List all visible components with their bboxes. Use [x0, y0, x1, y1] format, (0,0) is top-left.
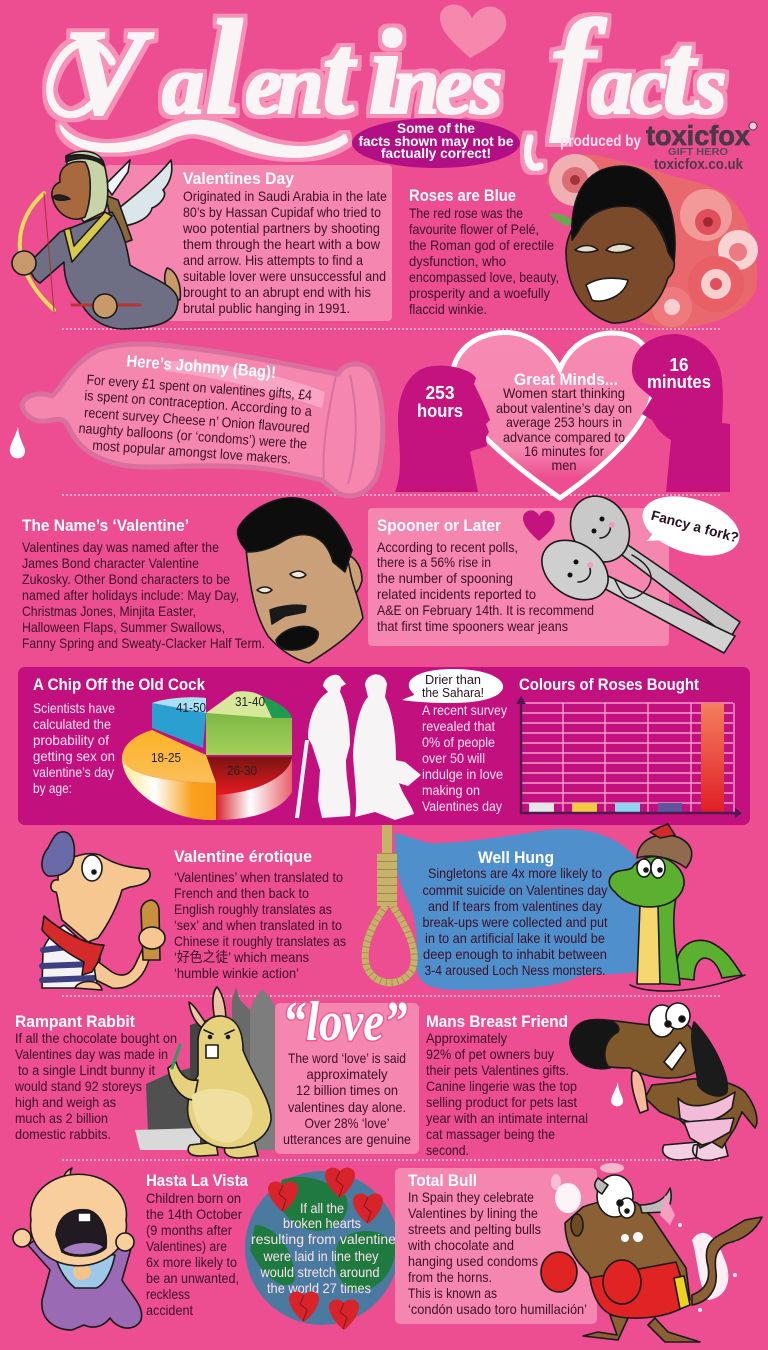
dotted dividers — [62, 329, 720, 1160]
text: spooner: related incidents reported to — [377, 586, 536, 602]
callout: disclaimer oval: facts shown may not be — [358, 133, 514, 149]
title: a — [162, 39, 204, 132]
text: hasta la vista — [146, 1190, 242, 1318]
text: sex probability — [33, 700, 115, 796]
text: well hung: 3-4 aroused Loch Ness monsters. — [424, 962, 606, 978]
text: love — [283, 1050, 411, 1147]
text: total bull: Valentines by lining the — [408, 1205, 538, 1221]
text: rampant rabbit: high and weigh as — [15, 1094, 116, 1110]
text: valentine erotique: ‘Valentines’ when translated to — [174, 869, 343, 885]
heading: hasta la vista: Hasta La Vista — [146, 1172, 249, 1190]
text: valentine erotique: ‘humble winkie action’ — [174, 965, 299, 981]
text: the name's valentine: Fanny Spring and Sweaty-Clacker Half Term. — [22, 635, 265, 651]
title: c — [630, 39, 667, 132]
icon: white splats — [551, 1174, 737, 1312]
title — [50, 0, 727, 167]
text: great minds: average 253 hours in — [506, 414, 622, 430]
text: the name's valentine: Zukosky. Other Bond characters to be — [22, 571, 230, 587]
icon: magenta heart — [523, 510, 555, 541]
text: mans breast friend: second. — [426, 1142, 469, 1158]
text: hasta la vista: 6x more likely to — [146, 1254, 237, 1270]
text: over 50 — [422, 702, 507, 814]
icon: woman silhouette — [395, 366, 490, 492]
icon: baby — [13, 1168, 142, 1330]
text: total bull: with chocolate and — [407, 1237, 514, 1253]
heart: great minds — [452, 332, 654, 498]
callout: fancy a fork — [635, 486, 747, 566]
text: hasta la vista: reckless — [146, 1286, 190, 1302]
text: spooner — [377, 539, 594, 634]
producer credit: produced by — [560, 133, 641, 150]
title: s — [693, 39, 727, 132]
text: hasta la vista: Children born on — [146, 1190, 241, 1206]
heading: roses are blue: Roses are Blue — [409, 187, 516, 205]
text: condom: most popular amongst love makers. — [92, 437, 292, 467]
text: well hung: break-ups were collected and put — [422, 914, 608, 930]
icon: white drop — [10, 427, 25, 458]
bar chart — [516, 696, 742, 818]
text: valentines day: Originated in Saudi Arabia in the late — [183, 188, 387, 204]
callout: drier than the sahara — [402, 669, 503, 703]
text: hasta la vista: accident — [146, 1302, 193, 1318]
text: the name's valentine: James Bond character Valentine — [22, 555, 199, 571]
text: great minds — [496, 385, 632, 473]
globe: broken hearts — [245, 1168, 403, 1330]
icon: white drop — [611, 1082, 623, 1106]
title: t — [662, 8, 698, 139]
panel: statistics — [18, 667, 750, 825]
text: globe — [251, 1200, 403, 1296]
producer credit: toxicfox — [646, 120, 750, 151]
text: globe: If all the — [300, 1200, 344, 1216]
heading: the name's valentine: The Name’s ‘Valentine’ — [22, 517, 189, 535]
text: valentines day: 80’s by Hassan Cupidaf who tried to — [183, 204, 381, 220]
text: 253 hours: hours — [417, 401, 463, 421]
text: love: approximately — [306, 1066, 388, 1082]
text: sex probability: getting sex on — [33, 748, 115, 764]
icon: skyscrapers — [135, 987, 282, 1150]
text: mans breast friend: their pets Valentines gifts. — [426, 1062, 569, 1078]
text: well hung — [422, 865, 608, 978]
text: great minds: men — [552, 457, 576, 473]
heading: total bull: Total Bull — [408, 1172, 477, 1190]
text: over 50: Valentines day — [422, 798, 502, 814]
text: love: Over 28% ‘love’ — [304, 1115, 390, 1131]
text: condom: recent survey Cheese n’ Onion flavoured — [84, 404, 310, 436]
text: 16 minutes: 16 — [670, 355, 688, 375]
text: valentines day: suitable lover were unsuccessful and — [183, 268, 386, 284]
text: valentines day: brought to an abrupt end with his — [183, 284, 371, 300]
text: valentine erotique: Chinese it roughly translates as — [174, 933, 346, 949]
text: great minds: about valentine’s day on — [496, 400, 632, 416]
text: the name's valentine: Halloween Flaps, Summer Swallows, — [22, 619, 225, 635]
icon: roses — [546, 154, 758, 328]
text: sex probability: Scientists have — [33, 700, 115, 716]
text: total bull: This is known as — [408, 1285, 497, 1301]
callout: disclaimer oval: Some of the — [397, 120, 475, 136]
title: i — [368, 5, 402, 140]
text: total bull: In Spain they celebrate — [408, 1189, 534, 1205]
text: love: valentines day alone. — [288, 1099, 406, 1115]
text: hasta la vista: the 14th October — [146, 1206, 242, 1222]
icon: elderly couple silhouette — [295, 674, 421, 820]
text: rampant rabbit: much as 2 billion — [15, 1110, 108, 1126]
text: roses are blue: the Roman god of erectile — [409, 237, 554, 253]
callout: drier than the sahara: Drier than — [425, 672, 481, 687]
producer credit — [560, 120, 757, 173]
text: 253 hours — [417, 383, 463, 421]
heading: here's johnny: Here’s Johnny (Bag)! — [126, 352, 277, 382]
text: the name's valentine: named after holidays include: May Day, — [22, 587, 239, 603]
text: sex probability: valentine’s day — [33, 764, 114, 780]
text: globe: the world 27 times — [267, 1280, 371, 1296]
text: love: The word ‘love’ is said — [288, 1050, 406, 1066]
text: mans breast friend: 92% of pet owners buy — [426, 1046, 554, 1062]
text: roses are blue: favourite flower of Pelé, — [409, 221, 539, 237]
text: well hung: in to an artificial lake it would be — [425, 930, 605, 946]
text: mans breast friend: cat massager being the — [426, 1126, 555, 1142]
text: total bull: hanging used condoms — [408, 1253, 538, 1269]
icon: noose — [365, 825, 414, 983]
text: great minds: advance compared to — [503, 429, 625, 445]
text: valentines day: brutal public hanging in 1991. — [183, 300, 350, 316]
text: valentine erotique: ‘sex’ and when translated in to — [174, 917, 342, 933]
text: spooner: A&E on February 14th. It is recommend — [377, 602, 594, 618]
text: mans breast friend: year with an intimate internal — [426, 1110, 588, 1126]
icon: condom — [22, 344, 383, 496]
callout: drier than the sahara: the Sahara! — [422, 685, 484, 700]
icon: loch ness monster — [609, 824, 745, 991]
text: sex probability: by age: — [33, 780, 72, 796]
panel: well hung — [395, 829, 643, 990]
icon: arab cupid — [12, 151, 180, 329]
text: sex probability: calculated the — [33, 716, 111, 732]
text: globe: were laid in line they — [263, 1248, 378, 1264]
labels: pie chart — [151, 695, 265, 778]
text: over 50: revealed that — [422, 718, 495, 734]
text: total bull: streets and pelting bulls — [408, 1221, 541, 1237]
text: globe: broken hearts — [283, 1215, 361, 1231]
panel: spooner or later — [368, 508, 669, 646]
text: over 50: making on — [422, 782, 480, 798]
icon: valentine zukosky head — [238, 498, 363, 663]
title: t — [322, 11, 357, 138]
text: sex probability: probability of — [33, 732, 109, 748]
title: e — [435, 39, 472, 132]
heading: mans breast friend: Mans Breast Friend — [426, 1013, 568, 1031]
text: rampant rabbit — [14, 1030, 177, 1142]
labels: pie chart: 18-25 — [151, 751, 181, 765]
title: V — [64, 5, 154, 140]
text: roses are blue: dysfunction, who — [409, 253, 506, 269]
text: spooner: that first time spooners wear jeans — [377, 618, 568, 634]
heading: colours of roses bought: Colours of Roses Bought — [519, 676, 699, 694]
text: over 50: 0% of people — [422, 734, 495, 750]
text: great minds: 16 minutes for — [524, 443, 604, 459]
text: spooner: According to recent polls, — [377, 539, 518, 555]
heading: love: “love” — [282, 991, 408, 1053]
text: mans breast friend: Approximately — [426, 1030, 507, 1046]
heading: valentines day: Valentines Day — [183, 170, 295, 188]
text: 16 minutes: minutes — [647, 372, 711, 392]
icon: title heart — [440, 5, 506, 58]
text: roses are blue: prosperity and a woefully — [409, 285, 550, 301]
title: a — [591, 39, 633, 132]
text: spooner: the number of spooning — [377, 570, 513, 586]
title: e — [245, 39, 282, 132]
text: roses are blue: encompassed love, beauty, — [409, 269, 559, 285]
callout: disclaimer oval — [352, 118, 520, 168]
heading: spooner: Spooner or Later — [377, 517, 502, 535]
text: condom — [77, 371, 314, 468]
text: the name's valentine — [22, 539, 265, 651]
text: condom: naughty balloons (or ‘condoms’) were the — [78, 420, 308, 452]
text: great minds: Women start thinking — [503, 385, 625, 401]
text: over 50: indulge in love — [422, 766, 503, 782]
text: valentine erotique: ‘好色之徒’ which means — [174, 949, 309, 965]
title: n — [277, 39, 324, 132]
text: mans breast friend: Canine lingerie was the top — [426, 1078, 577, 1094]
text: hasta la vista: (9 months after — [146, 1222, 232, 1238]
text: well hung: deep enough to inhabit between — [423, 946, 607, 962]
text: valentine erotique: French and then back to — [174, 885, 309, 901]
heading: well hung: Well Hung — [478, 849, 554, 867]
icons: broken hearts — [268, 1168, 383, 1330]
text: valentines day: them through the heart with a bow — [183, 236, 381, 252]
text: roses are blue — [409, 205, 559, 317]
icon: man silhouette — [632, 334, 730, 492]
text: valentines day — [182, 188, 387, 316]
text: love: 12 billion times on — [296, 1082, 398, 1098]
labels: pie chart: 41-50 — [176, 701, 206, 715]
text: mans breast friend — [426, 1030, 588, 1158]
icon: pele — [566, 166, 675, 323]
heading: valentine erotique: Valentine érotique — [174, 848, 312, 866]
panel: total bull — [395, 1168, 597, 1324]
text: globe: would stretch around — [260, 1264, 380, 1280]
text: rampant rabbit: If all the chocolate bought on — [15, 1030, 177, 1046]
icon: spoons — [531, 486, 740, 653]
text: valentines day: and arrow. His attempts to find a — [183, 252, 363, 268]
text: well hung: and If tears from valentines day — [428, 898, 602, 914]
labels: pie chart: 31-40 — [235, 695, 265, 709]
producer credit: GIFT HERO — [668, 147, 728, 158]
callout: disclaimer oval: factually correct! — [381, 145, 491, 161]
text: valentine erotique: English roughly translates as — [174, 901, 332, 917]
text: rampant rabbit: Valentines day was made in — [15, 1046, 168, 1062]
text: rampant rabbit: would stand 92 storeys — [14, 1078, 142, 1094]
text: condom: is spent on contraception. According to a — [84, 387, 313, 419]
text: over 50: A recent survey — [422, 702, 507, 718]
text: total bull — [407, 1189, 587, 1317]
text: hasta la vista: be an unwanted, — [146, 1270, 239, 1286]
text: total bull: from the horns. — [408, 1269, 492, 1285]
panel: valentines day — [105, 165, 392, 321]
text: rampant rabbit: to a single Lindt bunny it — [18, 1062, 155, 1078]
text: well hung: commit suicide on Valentines day — [422, 882, 608, 898]
icon: rabbit — [168, 987, 271, 1158]
text: the name's valentine: Valentines day was named after the — [22, 539, 219, 555]
title: n — [393, 39, 440, 132]
heading: chip off the old cock: A Chip Off the Old Cock — [33, 676, 206, 694]
text: 16 minutes — [647, 355, 711, 392]
text: roses are blue: The red rose was the — [409, 205, 523, 221]
text: mans breast friend: selling product for pets last — [426, 1094, 577, 1110]
heading: rampant rabbit: Rampant Rabbit — [15, 1013, 135, 1031]
title: s — [469, 39, 524, 132]
icon: bull — [541, 1163, 762, 1342]
text: hasta la vista: Valentines) are — [146, 1238, 227, 1254]
pie chart — [122, 691, 292, 820]
text: spooner: there is a 56% rise in — [377, 554, 491, 570]
text: total bull: ‘condón usado toro humillación’ — [408, 1301, 587, 1317]
text: 253 hours: 253 — [426, 383, 454, 403]
text: the name's valentine: Christmas Jones, Minjita Easter, — [22, 603, 196, 619]
text: rampant rabbit: domestic rabbits. — [15, 1126, 111, 1142]
text: condom: For every £1 spent on valentines gifts, £4 — [86, 371, 313, 403]
producer credit: toxicfox.co.uk — [654, 156, 744, 173]
icon: dog — [570, 1003, 757, 1160]
callout: fancy a fork: Fancy a fork? — [649, 507, 741, 546]
text: love: utterances are genuine — [283, 1131, 411, 1147]
panel: love — [275, 991, 419, 1154]
labels: pie chart: 26-30 — [227, 764, 257, 778]
text: valentine erotique — [174, 869, 346, 981]
heading: great minds: Great Minds... — [514, 371, 618, 389]
text: valentines day: woo potential partners by shooting — [182, 220, 380, 236]
text: roses are blue: flaccid winkie. — [409, 301, 487, 317]
text: globe: resulting from valentines — [251, 1231, 403, 1247]
text: over 50: over 50 will — [422, 750, 485, 766]
icon: french man — [42, 832, 165, 990]
text: well hung: Singletons are 4x more likely to — [428, 865, 602, 881]
